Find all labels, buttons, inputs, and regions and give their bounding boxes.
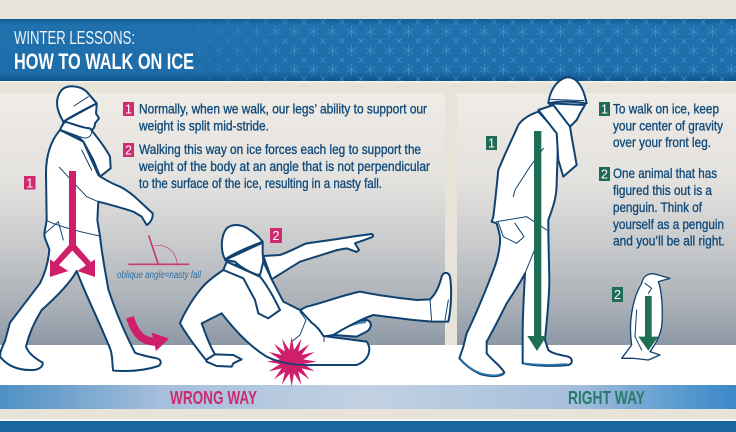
badge 1 numeral: 1 bbox=[125, 102, 132, 116]
tip two bbox=[613, 165, 725, 248]
shoe sole shading bbox=[338, 322, 366, 332]
penguin head marking bbox=[635, 283, 652, 350]
explanation one bbox=[138, 100, 427, 134]
scarf bbox=[538, 105, 577, 177]
tip one bbox=[613, 100, 723, 150]
text block: wrong way explanation bbox=[123, 100, 430, 191]
badge 1 bbox=[123, 102, 134, 116]
ice floor bbox=[0, 345, 736, 385]
penguin body bbox=[622, 274, 670, 360]
figure: man falling on ice bbox=[180, 225, 451, 387]
explanation two: to the surface of the ice, resulting in a nasty fall. bbox=[139, 175, 382, 191]
face bbox=[550, 103, 585, 127]
tip one: To walk on ice, keep bbox=[613, 100, 719, 116]
header banner bbox=[0, 19, 736, 82]
shoe sole shading bbox=[461, 359, 567, 375]
badge 2 bbox=[123, 143, 134, 157]
pink split arrow bbox=[50, 171, 95, 277]
panel: right way background bbox=[457, 93, 736, 345]
badge: wrong way fall 2 bbox=[270, 228, 282, 243]
face bbox=[225, 243, 263, 275]
green arrow on penguin bbox=[638, 296, 658, 351]
torso and bent leg bbox=[180, 262, 369, 365]
badge 2 numeral: 2 bbox=[125, 144, 132, 158]
badge 1 bbox=[599, 102, 610, 116]
figure: man walking right way bbox=[459, 77, 587, 376]
impact outline bbox=[267, 357, 327, 365]
badge: right way 1 bbox=[486, 136, 497, 150]
title line one: WINTER LESSONS: bbox=[14, 28, 135, 48]
scarf bbox=[60, 122, 111, 177]
badge: wrong way 1: 1 bbox=[26, 176, 33, 190]
body and legs bbox=[459, 112, 572, 376]
hat bbox=[548, 77, 587, 103]
extended leg bbox=[300, 273, 451, 337]
pink starburst bbox=[267, 337, 317, 387]
body bbox=[0, 130, 161, 371]
pointing arm and hand bbox=[263, 234, 373, 279]
arrow: pink curved arrow bbox=[130, 317, 169, 351]
explanation two: weight of the body at an angle that is not perpendicular bbox=[138, 158, 430, 174]
badge 2 bbox=[599, 167, 610, 181]
title line two: HOW TO WALK ON ICE bbox=[14, 49, 194, 74]
icon: oblique angle diagram bbox=[128, 235, 189, 264]
tip two: One animal that has bbox=[613, 165, 717, 181]
tip one: over your front leg. bbox=[613, 134, 711, 150]
green arrow bbox=[527, 131, 547, 351]
badge 2 numeral: 2 bbox=[601, 168, 608, 182]
tip two: figured this out is a bbox=[613, 182, 712, 198]
badge: penguin 2: 2 bbox=[614, 288, 621, 302]
bottom blue bar bbox=[0, 419, 736, 432]
jacket details bbox=[45, 97, 100, 240]
scarf bbox=[223, 262, 280, 318]
badge: wrong way fall 2: 2 bbox=[273, 229, 280, 243]
explanation one: Normally, when we walk, our legs’ ability to support our bbox=[139, 100, 427, 116]
caption: oblique angle: oblique angle=nasty fall bbox=[117, 270, 202, 281]
explanation two bbox=[138, 141, 430, 191]
ankle detail bbox=[430, 299, 448, 322]
supporting hand bbox=[206, 354, 242, 367]
label: wrong way: WRONG WAY bbox=[170, 388, 257, 408]
tip two: penguin. Think of bbox=[613, 199, 702, 215]
face bbox=[63, 103, 99, 133]
figure: penguin bbox=[622, 274, 670, 360]
badge: penguin 2 bbox=[612, 287, 623, 302]
explanation one: weight is split mid-stride. bbox=[138, 118, 269, 134]
hat bbox=[222, 225, 263, 259]
title bbox=[14, 28, 194, 74]
label: right way: RIGHT WAY bbox=[568, 388, 645, 408]
badge 1 numeral: 1 bbox=[601, 102, 608, 116]
hat bbox=[57, 86, 97, 122]
clothing details bbox=[497, 99, 584, 273]
footer band bbox=[0, 385, 736, 409]
figure: man walking wrong way bbox=[0, 86, 161, 371]
shoe of bent leg bbox=[333, 320, 371, 337]
text block: right way explanation bbox=[599, 100, 725, 248]
badge: right way 1: 1 bbox=[488, 136, 495, 150]
panel: wrong way background bbox=[0, 93, 445, 345]
badge: wrong way 1 bbox=[24, 176, 36, 190]
explanation two: Walking this way on ice forces each leg to support the bbox=[139, 141, 421, 157]
trouser details bbox=[292, 312, 324, 342]
